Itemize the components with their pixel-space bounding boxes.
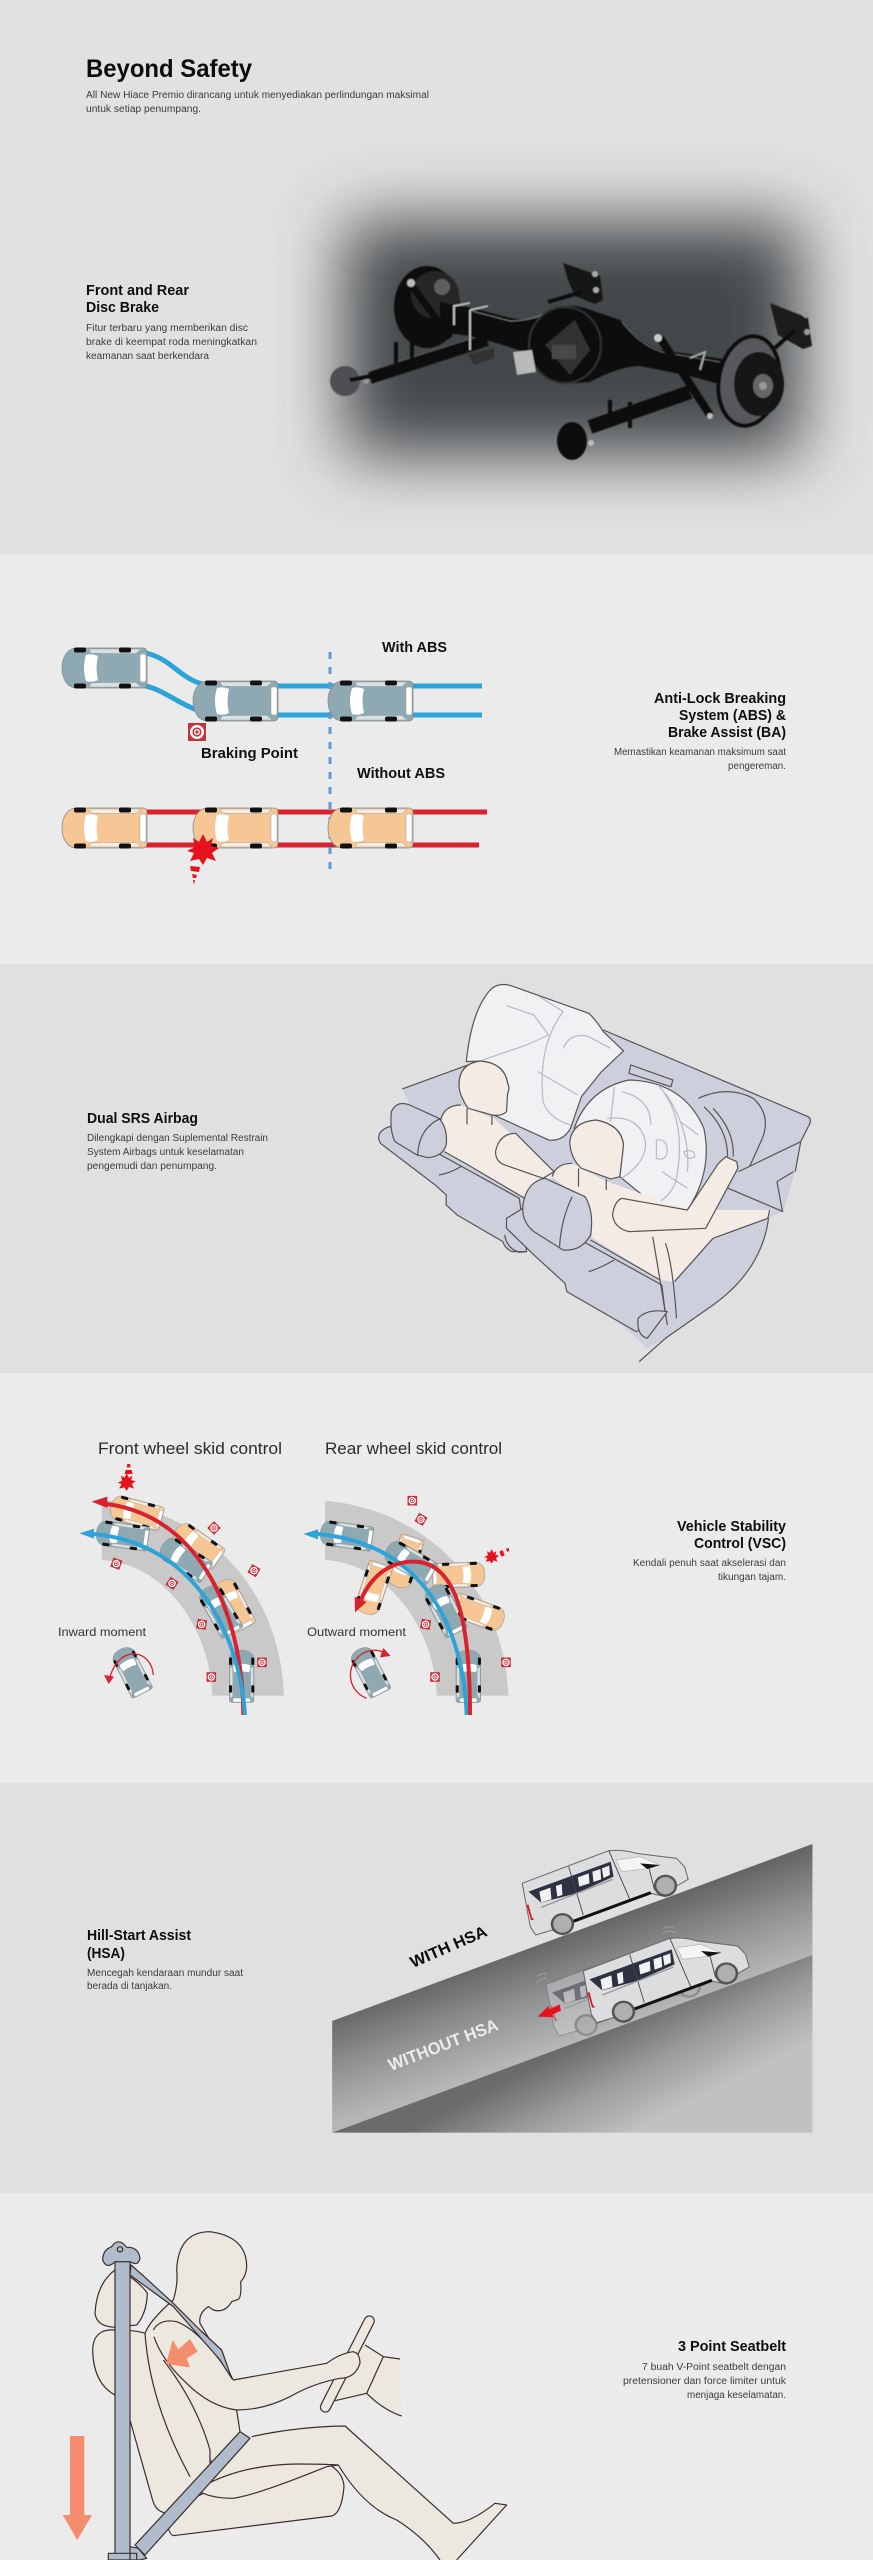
road band lower bbox=[332, 1955, 812, 2133]
description: seatbelt bbox=[623, 2362, 787, 2401]
description: airbag bbox=[87, 1133, 268, 1172]
illustration: dual airbag cabin bbox=[379, 985, 810, 1362]
buckle bbox=[108, 2547, 147, 2560]
panel: ABS text bbox=[614, 690, 786, 772]
description: disc brake: keamanan saat berkendara bbox=[86, 351, 209, 362]
intro text: untuk setiap penumpang. bbox=[86, 104, 201, 115]
description: ABS bbox=[614, 747, 786, 772]
red tyre tracks bbox=[140, 812, 487, 845]
vertical belt bbox=[115, 2262, 130, 2560]
description: VSC: tikungan tajam. bbox=[718, 1572, 786, 1583]
heading: HSA: Hill-Start Assist bbox=[87, 1927, 191, 1944]
description: seatbelt: pretensioner dan force limiter untuk bbox=[623, 2376, 787, 2387]
orange cars bbox=[353, 1533, 508, 1634]
panel: HSA text bbox=[87, 1927, 243, 1992]
body and leg bbox=[145, 2232, 507, 2560]
far arm bbox=[335, 2345, 402, 2416]
cars with ABS bbox=[62, 648, 413, 722]
heading: seatbelt: 3 Point Seatbelt bbox=[678, 2338, 786, 2355]
driver body bbox=[552, 1120, 771, 1325]
orange cars bbox=[108, 1494, 257, 1634]
description: disc brake bbox=[86, 323, 257, 362]
description: HSA: berada di tanjakan. bbox=[87, 1981, 172, 1992]
description: seatbelt: 7 buah V-Point seatbelt dengan bbox=[642, 2362, 786, 2373]
blue tyre tracks bbox=[142, 653, 482, 715]
driver airbag bbox=[574, 1080, 706, 1210]
label: outward moment: Outward moment bbox=[307, 1625, 407, 1639]
rollback arrow bbox=[538, 2004, 561, 2017]
panel: disc brake text bbox=[86, 282, 257, 362]
label: braking point: Braking Point bbox=[201, 745, 298, 762]
outward moment car bbox=[348, 1644, 392, 1699]
passenger seat bbox=[379, 1127, 527, 1252]
label: without ABS: Without ABS bbox=[357, 765, 445, 782]
heading: disc brake bbox=[86, 282, 189, 316]
heading: disc brake: Disc Brake bbox=[86, 299, 159, 316]
headrest bbox=[95, 2270, 147, 2327]
road bbox=[102, 1500, 284, 1696]
blue path arrow bbox=[303, 1529, 467, 1715]
shake marks bbox=[537, 1927, 676, 1983]
description: VSC bbox=[633, 1558, 786, 1583]
description: VSC: Kendali penuh saat akselerasi dan bbox=[633, 1558, 786, 1569]
description: HSA: Mencegah kendaraan mundur saat bbox=[87, 1968, 243, 1979]
anchor bolt bbox=[117, 2247, 123, 2252]
diagram: rear wheel skid control bbox=[303, 1496, 511, 1715]
label: rear wheel skid control: Rear wheel skid control bbox=[325, 1439, 502, 1458]
panel: airbag text bbox=[87, 1110, 268, 1172]
diagram: ABS comparison bbox=[62, 639, 487, 885]
heading: HSA bbox=[87, 1927, 191, 1962]
cones bbox=[408, 1496, 511, 1682]
heading: HSA: (HSA) bbox=[87, 1945, 125, 1962]
panel: seatbelt text bbox=[623, 2338, 787, 2401]
burst bbox=[118, 1464, 136, 1491]
divider bbox=[328, 652, 332, 873]
road bbox=[325, 1501, 508, 1696]
lap belt bbox=[135, 2432, 250, 2555]
intro text: All New Hiace Premio dirancang untuk menyediakan perlindungan maksimal bbox=[86, 90, 429, 101]
illustration: rear axle with disc brakes bbox=[330, 263, 812, 460]
heading: VSC bbox=[677, 1518, 787, 1552]
description: HSA bbox=[87, 1968, 243, 1992]
driver headrest bbox=[505, 1178, 667, 1338]
heading: VSC: Vehicle Stability bbox=[677, 1518, 787, 1535]
heading: ABS bbox=[654, 690, 786, 741]
description: airbag: System Airbags untuk keselamatan bbox=[87, 1147, 244, 1158]
label: with HSA: WITH HSA bbox=[408, 1923, 490, 1972]
steering wheel bbox=[319, 2314, 376, 2414]
driver seat bbox=[507, 1208, 666, 1332]
cars without ABS bbox=[62, 808, 413, 848]
description: ABS: pengereman. bbox=[728, 761, 786, 772]
heading: ABS: Anti-Lock Breaking bbox=[654, 690, 786, 707]
van without HSA bbox=[583, 1938, 749, 2023]
title: Beyond Safety bbox=[86, 55, 252, 83]
gray cars bbox=[319, 1519, 481, 1703]
ghost van rolling back bbox=[546, 1951, 712, 2036]
description: airbag: pengemudi dan penumpang. bbox=[87, 1161, 217, 1172]
intro text bbox=[86, 90, 429, 115]
seat cushion bbox=[165, 2465, 344, 2536]
belt anchor bbox=[103, 2242, 140, 2265]
inward moment car bbox=[104, 1644, 153, 1699]
shoulder belt bbox=[130, 2265, 232, 2378]
seat back bbox=[93, 2323, 217, 2513]
diagram: front wheel skid control bbox=[79, 1464, 284, 1715]
gray cars bbox=[95, 1519, 254, 1703]
arrow: chest force bbox=[166, 2339, 198, 2367]
label: with ABS: With ABS bbox=[382, 639, 447, 656]
van with HSA bbox=[522, 1850, 688, 1935]
passenger airbag bbox=[466, 985, 623, 1140]
cabin interior bbox=[402, 1030, 810, 1348]
heading: airbag: Dual SRS Airbag bbox=[87, 1110, 198, 1127]
blue path arrow bbox=[79, 1529, 245, 1715]
passenger headrest bbox=[391, 1103, 461, 1175]
label: front wheel skid control: Front wheel skid control bbox=[98, 1439, 282, 1458]
arrow: pull down bbox=[63, 2436, 92, 2540]
label: inward moment: Inward moment bbox=[58, 1625, 147, 1639]
illustration: seated driver with 3 point seatbelt bbox=[63, 2232, 507, 2560]
panel: VSC text bbox=[633, 1518, 787, 1583]
description: airbag: Dilengkapi dengan Suplemental Restrain bbox=[87, 1133, 268, 1144]
passenger body bbox=[441, 1061, 556, 1198]
dark glow behind axle bbox=[345, 222, 800, 455]
heading: disc brake: Front and Rear bbox=[86, 282, 189, 299]
cones bbox=[110, 1521, 267, 1682]
description: disc brake: Fitur terbaru yang memberikan disc bbox=[86, 323, 248, 334]
heading: VSC: Control (VSC) bbox=[694, 1535, 786, 1552]
braking point marker bbox=[188, 723, 206, 741]
collision burst bbox=[187, 834, 219, 885]
road band upper bbox=[332, 1844, 812, 2133]
burst bbox=[484, 1548, 509, 1564]
diagram: hill-start assist bbox=[332, 1844, 812, 2133]
description: disc brake: brake di keempat roda meningkatkan bbox=[86, 337, 257, 348]
red path arrow bbox=[92, 1497, 243, 1715]
red path arrow bbox=[355, 1562, 470, 1715]
description: ABS: Memastikan keamanan maksimum saat bbox=[614, 747, 786, 758]
heading: ABS: Brake Assist (BA) bbox=[668, 724, 786, 741]
description: seatbelt: menjaga keselamatan. bbox=[687, 2390, 786, 2401]
heading: ABS: System (ABS) & bbox=[679, 707, 786, 724]
label: without HSA: WITHOUT HSA bbox=[386, 2015, 501, 2075]
